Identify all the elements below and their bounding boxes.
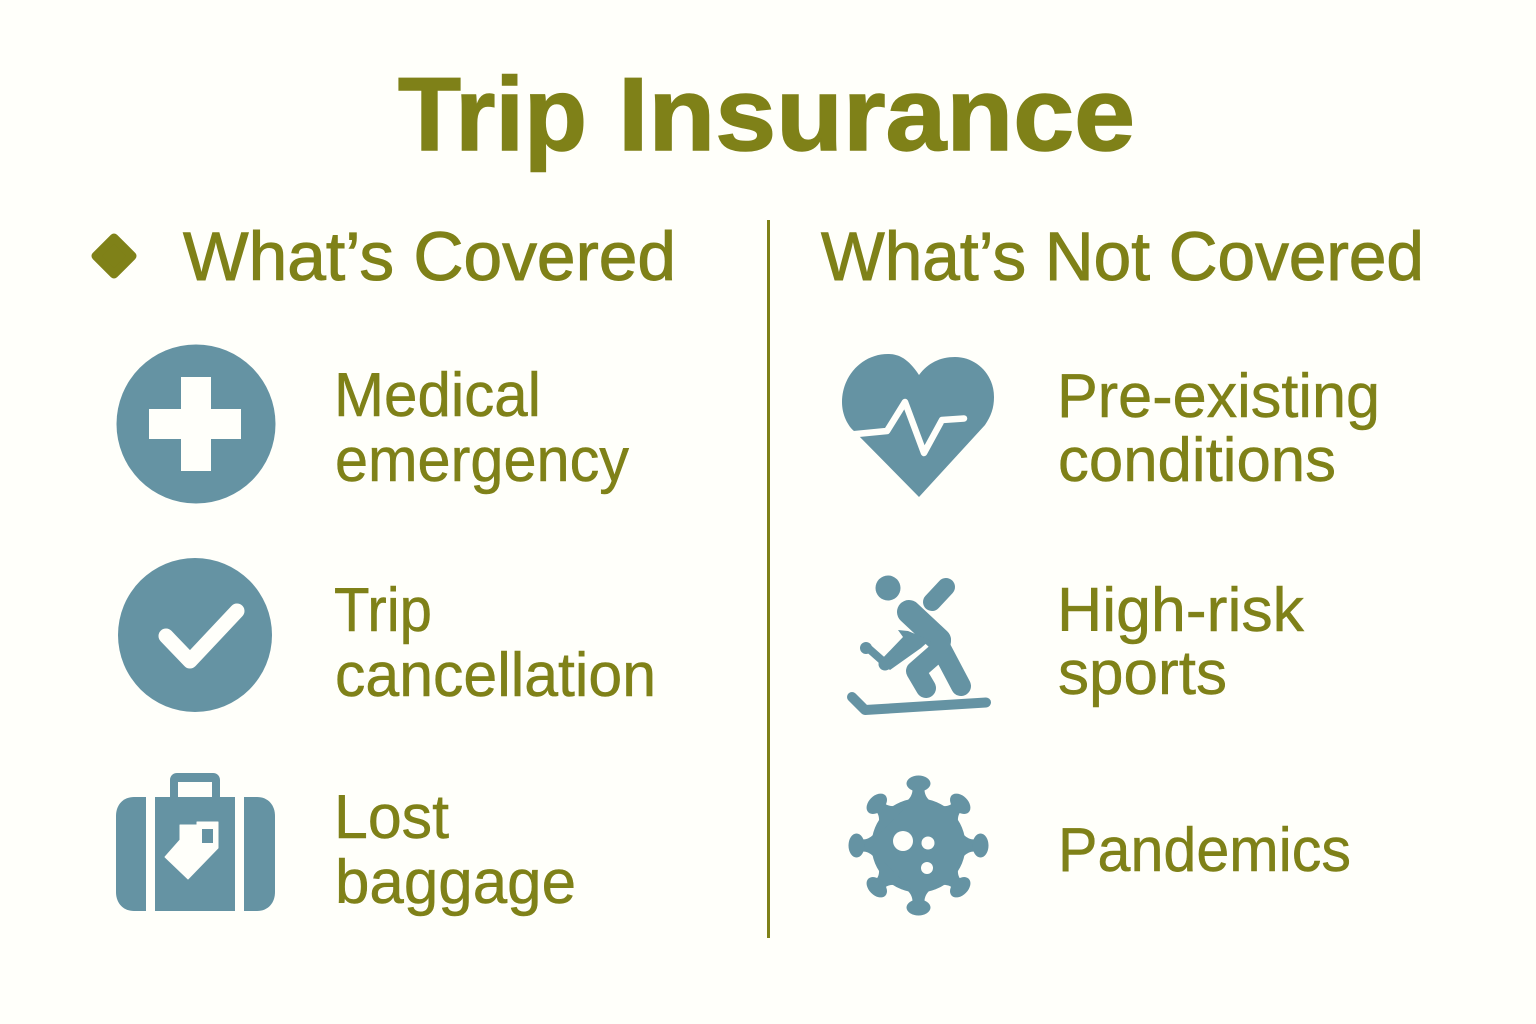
label: pre-existing conditions: Pre-existing [1057,362,1380,431]
label: pre-existing conditions: conditions [1058,426,1336,495]
heading: what's covered: What’s Covered [183,218,676,295]
label: pre-existing conditions [1057,362,1380,495]
label: high-risk sports: High-risk [1057,576,1305,645]
item: high-risk sports [852,576,1305,710]
label: medical emergency [334,361,629,495]
label: high-risk sports [1057,576,1305,708]
label: pandemics: Pandemics [1058,816,1351,885]
icon: heart with pulse [842,354,994,497]
item: trip cancellation [118,558,656,712]
item: pre-existing conditions [842,354,1380,497]
label: medical emergency: emergency [335,426,629,495]
title: Insurance [618,57,1135,173]
item: pandemics [848,776,1351,916]
icon: diamond bullet [96,238,132,274]
icon: suitcase with tag [116,773,275,911]
label: trip cancellation: cancellation [335,641,656,710]
label: trip cancellation [334,576,656,710]
icon: medical cross [116,344,276,504]
center divider [767,220,770,938]
panel: covered items [116,344,656,917]
label: lost baggage: Lost [334,783,449,852]
icon: virus [848,776,988,916]
title: Trip [398,57,587,173]
label: medical emergency: Medical [334,361,541,430]
item: medical emergency [116,344,629,504]
label: trip cancellation: Trip [334,576,432,645]
item: lost baggage [116,773,576,917]
title [398,57,1135,173]
label: lost baggage: baggage [335,848,576,917]
heading: what's not covered: What’s Not Covered [821,218,1424,295]
label: lost baggage [334,783,576,917]
icon: check mark [118,558,272,712]
panel: not covered items [842,354,1380,916]
icon: skier [852,576,986,710]
label: high-risk sports: sports [1058,639,1227,708]
